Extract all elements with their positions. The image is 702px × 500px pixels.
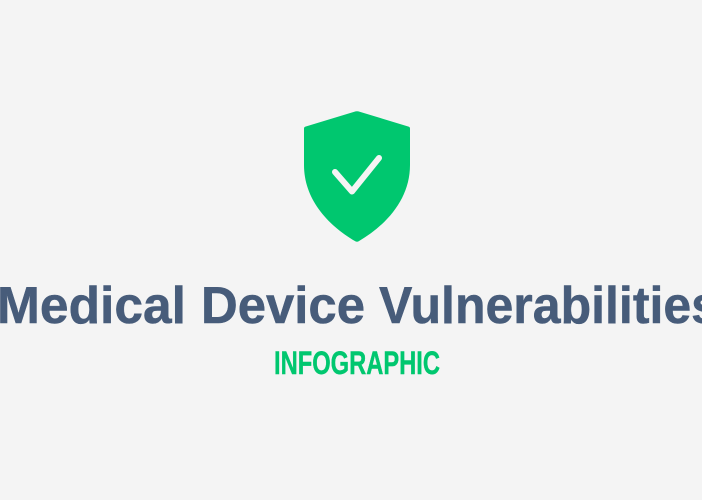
title: [0, 277, 702, 335]
title: Device: [201, 277, 365, 335]
shield body: [304, 111, 410, 242]
icon: shield with check mark: [304, 111, 410, 242]
check mark: [335, 158, 379, 192]
title: Medical: [0, 277, 186, 335]
subtitle: INFOGRAPHIC: [274, 345, 440, 381]
